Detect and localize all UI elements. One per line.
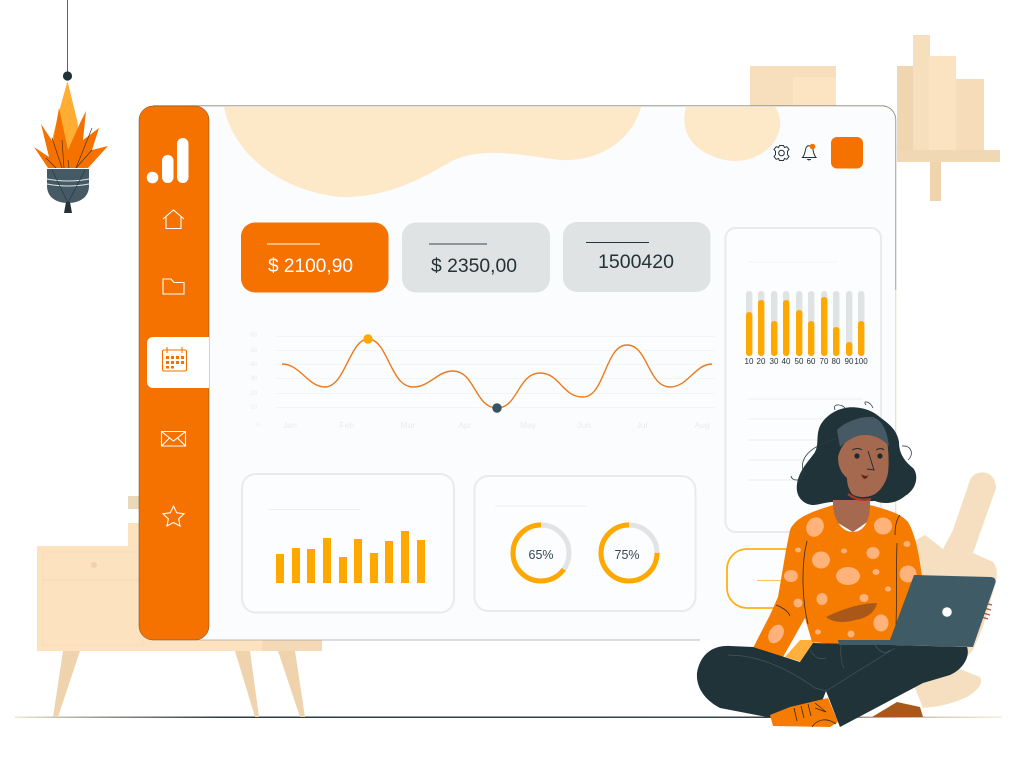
icon: notification bell [802,144,816,160]
sweater pocket [826,603,877,622]
bar labels: 30 [770,357,779,366]
facial features [852,448,884,479]
outlined button [727,549,817,608]
icon: settings gear [774,146,789,160]
x-axis labels: Jan [283,420,297,430]
stat card: 2100,90: $ 2100,90 [268,256,353,277]
background box on shelf [750,66,836,106]
laptop logo [942,607,952,617]
donut: 65%: 65% [528,548,554,562]
ground line [15,716,1002,718]
orange shoe [770,698,838,727]
bar labels: 40 [782,357,791,366]
sweater fold lines [776,515,900,625]
dashboard window [139,106,896,640]
donut: 65% [513,525,569,581]
background shelf with books [897,35,1000,201]
bar tracks [746,291,864,356]
brown shoe [872,702,923,717]
marker: trough [492,403,502,413]
icon: envelope [162,432,186,446]
bar labels: 60 [807,357,816,366]
icon: home [163,210,184,228]
active tab: calendar [147,337,209,388]
x-axis labels: Aug [694,420,710,430]
donut: 75% [601,525,657,581]
decorative blobs at top [224,107,780,197]
sweater spots [765,514,916,646]
columns [276,531,425,583]
stat card: 1500420 [563,222,710,292]
bar values [746,297,864,356]
bar labels: 50 [795,357,804,366]
icon: star [163,506,184,526]
avatar square [831,137,863,168]
x-axis labels: Mar [401,420,415,430]
hanging plant [34,0,108,213]
bar labels: 80 [832,357,841,366]
y-axis labels: 0 [256,423,260,429]
stat card: 2100,90 [241,222,388,292]
jeans seams [728,645,895,691]
collar [848,494,871,500]
headband [837,417,889,447]
line chart [251,333,715,430]
trend curve [282,339,712,408]
y-axis labels: 30 [251,376,258,382]
panel: column chart [242,474,454,612]
donut: 75%: 75% [614,548,640,562]
x-axis labels: May [520,420,537,430]
icon: folder [163,279,184,294]
background cabinet [37,496,322,717]
bar labels: 20 [757,357,766,366]
face [838,435,889,497]
yellow cushion [785,640,817,662]
neck [833,500,870,532]
sweater [753,505,922,657]
sidebar [139,106,209,640]
stat card: 1500420: 1500420 [598,252,674,273]
y-axis labels: 10 [251,405,258,411]
x-axis labels: Apr [458,420,472,430]
logo: bar mark [147,138,188,183]
y-axis labels: 20 [251,391,258,397]
x-axis labels: Jul [637,420,648,430]
bar labels: 90 [845,357,854,366]
y-axis labels: 60 [251,333,258,339]
stat card: 2350,00 [402,222,550,292]
y-axis labels: 50 [251,348,258,354]
hair [797,407,916,505]
stat card: 2350,00: $ 2350,00 [431,256,517,277]
panel: vertical progress bars [726,228,881,532]
background plant leaves [880,472,997,708]
marker: peak [363,334,373,344]
x-axis labels: Feb [340,420,355,430]
x-axis labels [283,420,710,430]
x-axis labels: Jun [577,420,591,430]
person with laptop [697,402,996,727]
bar labels: 10 [745,357,754,366]
hand fingers [982,603,992,619]
y-axis labels: 40 [251,362,258,368]
bar labels: 100 [854,357,868,366]
legs [697,643,968,727]
bar labels: 70 [820,357,829,366]
bar labels [745,357,868,366]
laptop [838,575,996,647]
y-axis labels [251,333,260,429]
panel: progress donuts [474,476,696,611]
stray hair curls [791,402,911,480]
